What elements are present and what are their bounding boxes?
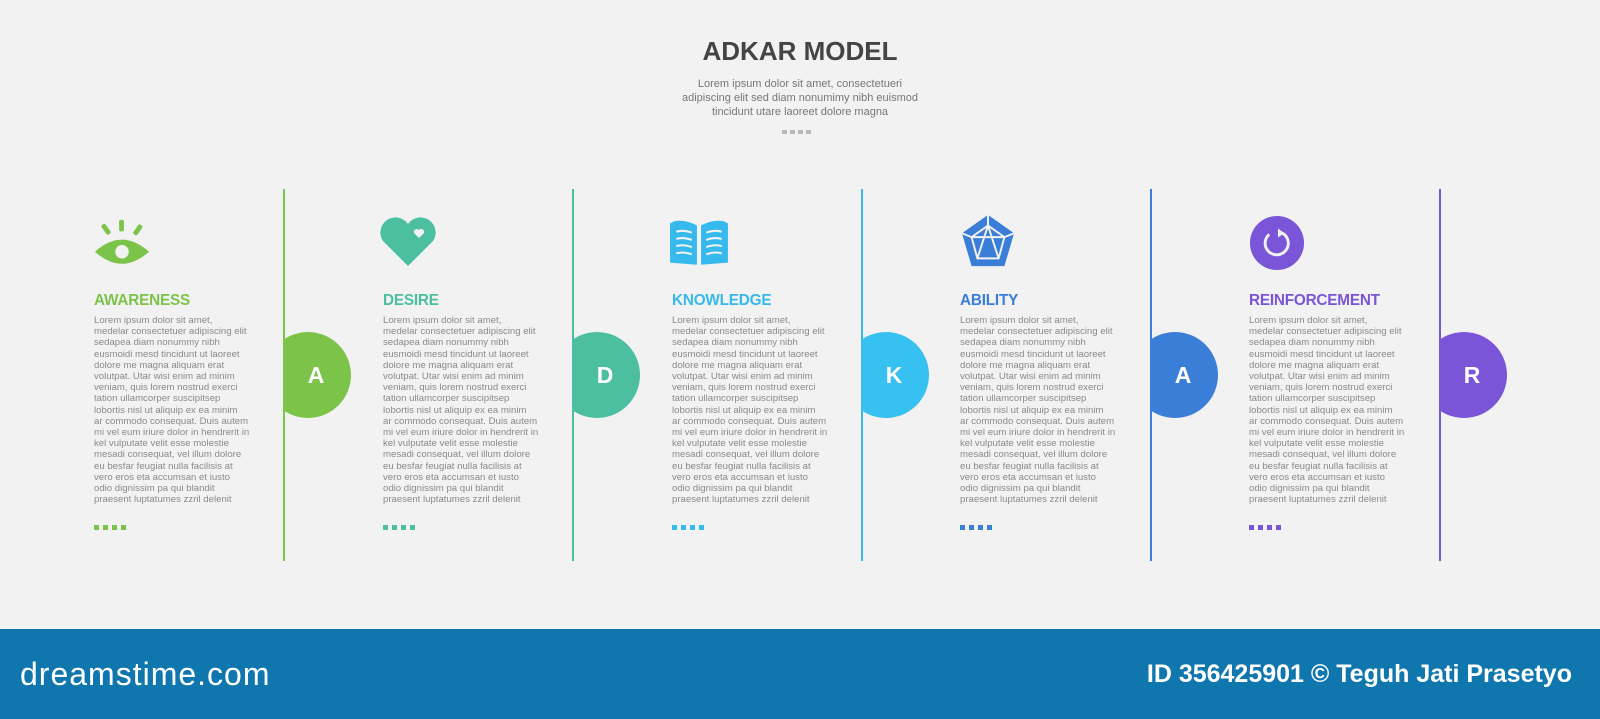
body text: sedapea diam nonummy nibh	[672, 337, 798, 348]
dots	[1249, 525, 1281, 530]
body text: praesent luptatumes zzril delenit	[672, 494, 810, 505]
body text: dolore me magna aliquam erat	[1249, 360, 1379, 371]
body text: eu besfar feugiat nulla facilisis at	[383, 461, 522, 472]
body text: lobortis nisl ut aliquip ex ea minim	[94, 405, 237, 416]
heading: REINFORCEMENT	[1249, 292, 1380, 309]
heading: AWARENESS	[94, 292, 190, 309]
body text: eusmoidi mesd tincidunt ut laoreet	[672, 349, 818, 360]
body text: mesadi consequat, vel illum dolore	[94, 449, 241, 460]
body text: tation ullamcorper suscipitsep	[1249, 393, 1375, 404]
body text: mi vel eum iriure dolor in hendrerit in	[960, 427, 1115, 438]
body text: kel vulputate velit esse molestie	[1249, 438, 1384, 449]
body text: ar commodo consequat. Duis autem	[1249, 416, 1403, 427]
dots	[94, 525, 126, 530]
divider line D	[572, 189, 574, 561]
body text: Lorem ipsum dolor sit amet,	[672, 315, 790, 326]
body text: praesent luptatumes zzril delenit	[383, 494, 521, 505]
body text: volutpat. Utar wisi enim ad minim	[383, 371, 524, 382]
body text: Lorem ipsum dolor sit amet,	[383, 315, 501, 326]
divider line K	[861, 189, 863, 561]
body text: lobortis nisl ut aliquip ex ea minim	[960, 405, 1103, 416]
body text: odio dignissim pa qui blandit	[383, 483, 504, 494]
body text	[383, 315, 538, 505]
body text: veniam, quis lorem nostrud exerci	[960, 382, 1103, 393]
body text	[94, 315, 249, 505]
body text: Lorem ipsum dolor sit amet,	[94, 315, 212, 326]
circle K: K	[886, 362, 902, 388]
circle A	[285, 332, 351, 418]
divider line A	[283, 189, 285, 561]
title: ADKAR MODEL	[702, 36, 898, 66]
body text: veniam, quis lorem nostrud exerci	[94, 382, 237, 393]
heading: ABILITY	[960, 292, 1018, 309]
body text: veniam, quis lorem nostrud exerci	[383, 382, 526, 393]
panel: awareness	[94, 220, 249, 530]
body text: mesadi consequat, vel illum dolore	[672, 449, 819, 460]
body text	[1249, 315, 1404, 505]
circle K	[863, 332, 929, 418]
body text: ar commodo consequat. Duis autem	[960, 416, 1114, 427]
body text: eusmoidi mesd tincidunt ut laoreet	[960, 349, 1106, 360]
footer credit: ID 356425901 © Teguh Jati Prasetyo	[1147, 660, 1572, 688]
body text: vero eros eta accumsan et iusto	[960, 472, 1096, 483]
body text: mesadi consequat, vel illum dolore	[1249, 449, 1396, 460]
body text: sedapea diam nonummy nibh	[960, 337, 1086, 348]
body text: eu besfar feugiat nulla facilisis at	[94, 461, 233, 472]
panel: reinforcement	[1249, 216, 1404, 530]
body text: veniam, quis lorem nostrud exerci	[672, 382, 815, 393]
body text: Lorem ipsum dolor sit amet,	[960, 315, 1078, 326]
body text: eu besfar feugiat nulla facilisis at	[672, 461, 811, 472]
body text: medelar consectetuer adipiscing elit	[94, 326, 247, 337]
icon: book	[670, 220, 728, 265]
body text: odio dignissim pa qui blandit	[94, 483, 215, 494]
body text: praesent luptatumes zzril delenit	[960, 494, 1098, 505]
body text: volutpat. Utar wisi enim ad minim	[960, 371, 1101, 382]
body text: volutpat. Utar wisi enim ad minim	[1249, 371, 1390, 382]
body text: mesadi consequat, vel illum dolore	[960, 449, 1107, 460]
body text	[960, 315, 1115, 505]
body text: volutpat. Utar wisi enim ad minim	[94, 371, 235, 382]
body text: praesent luptatumes zzril delenit	[94, 494, 232, 505]
body text: mi vel eum iriure dolor in hendrerit in	[94, 427, 249, 438]
body text: odio dignissim pa qui blandit	[960, 483, 1081, 494]
body text: dolore me magna aliquam erat	[672, 360, 802, 371]
body text: kel vulputate velit esse molestie	[383, 438, 518, 449]
body text: kel vulputate velit esse molestie	[94, 438, 229, 449]
body text: odio dignissim pa qui blandit	[1249, 483, 1370, 494]
circle A2: A	[1175, 362, 1191, 388]
body text: kel vulputate velit esse molestie	[960, 438, 1095, 449]
icon: pentagon radar	[962, 216, 1014, 266]
body text: sedapea diam nonummy nibh	[94, 337, 220, 348]
circle R: R	[1464, 362, 1480, 388]
icon: refresh circle	[1250, 216, 1304, 270]
circle A: A	[308, 362, 324, 388]
body text: eu besfar feugiat nulla facilisis at	[1249, 461, 1388, 472]
body text: sedapea diam nonummy nibh	[1249, 337, 1375, 348]
body text: mi vel eum iriure dolor in hendrerit in	[672, 427, 827, 438]
body text: vero eros eta accumsan et iusto	[672, 472, 808, 483]
body text: dolore me magna aliquam erat	[383, 360, 513, 371]
body text: mi vel eum iriure dolor in hendrerit in	[383, 427, 538, 438]
icon: heart	[380, 217, 436, 266]
body text: praesent luptatumes zzril delenit	[1249, 494, 1387, 505]
body text: tation ullamcorper suscipitsep	[383, 393, 509, 404]
body text: medelar consectetuer adipiscing elit	[960, 326, 1113, 337]
body text: lobortis nisl ut aliquip ex ea minim	[383, 405, 526, 416]
body text: dolore me magna aliquam erat	[960, 360, 1090, 371]
dots	[960, 525, 992, 530]
body text: eu besfar feugiat nulla facilisis at	[960, 461, 1099, 472]
body text: eusmoidi mesd tincidunt ut laoreet	[94, 349, 240, 360]
body text: medelar consectetuer adipiscing elit	[1249, 326, 1402, 337]
body text: sedapea diam nonummy nibh	[383, 337, 509, 348]
body text: tation ullamcorper suscipitsep	[94, 393, 220, 404]
body text: volutpat. Utar wisi enim ad minim	[672, 371, 813, 382]
icon: eye	[95, 220, 149, 264]
body text: lobortis nisl ut aliquip ex ea minim	[1249, 405, 1392, 416]
body text: odio dignissim pa qui blandit	[672, 483, 793, 494]
heading: DESIRE	[383, 292, 439, 309]
panel: knowledge	[670, 220, 827, 530]
body text: Lorem ipsum dolor sit amet,	[1249, 315, 1367, 326]
body text: tation ullamcorper suscipitsep	[960, 393, 1086, 404]
body text: eusmoidi mesd tincidunt ut laoreet	[383, 349, 529, 360]
body text: dolore me magna aliquam erat	[94, 360, 224, 371]
body text: tation ullamcorper suscipitsep	[672, 393, 798, 404]
heading: KNOWLEDGE	[672, 292, 771, 309]
divider line R	[1439, 189, 1441, 561]
body text: medelar consectetuer adipiscing elit	[672, 326, 825, 337]
divider line A2	[1150, 189, 1152, 561]
dots	[383, 525, 415, 530]
body text: veniam, quis lorem nostrud exerci	[1249, 382, 1392, 393]
body text: ar commodo consequat. Duis autem	[672, 416, 826, 427]
body text: eusmoidi mesd tincidunt ut laoreet	[1249, 349, 1395, 360]
body text: kel vulputate velit esse molestie	[672, 438, 807, 449]
subtitle: tincidunt utare laoreet dolore magna	[712, 106, 888, 118]
body text: vero eros eta accumsan et iusto	[94, 472, 230, 483]
body text: ar commodo consequat. Duis autem	[383, 416, 537, 427]
body text: lobortis nisl ut aliquip ex ea minim	[672, 405, 815, 416]
panel: desire	[380, 217, 538, 530]
footer logo: dreamstime.com	[20, 656, 270, 692]
body text: vero eros eta accumsan et iusto	[1249, 472, 1385, 483]
subtitle: Lorem ipsum dolor sit amet, consectetueri	[698, 78, 902, 90]
circle D	[574, 332, 640, 418]
body text: medelar consectetuer adipiscing elit	[383, 326, 536, 337]
circle A2	[1152, 332, 1218, 418]
subtitle: adipiscing elit sed diam nonumimy nibh euismod	[682, 92, 918, 104]
title dots	[782, 130, 811, 134]
footer band	[0, 629, 1600, 719]
dots	[672, 525, 704, 530]
subtitle	[682, 78, 918, 118]
body text: mesadi consequat, vel illum dolore	[383, 449, 530, 460]
body text: ar commodo consequat. Duis autem	[94, 416, 248, 427]
panel: ability	[960, 216, 1115, 530]
circle D: D	[597, 362, 613, 388]
body text	[672, 315, 827, 505]
circle R	[1441, 332, 1507, 418]
body text: mi vel eum iriure dolor in hendrerit in	[1249, 427, 1404, 438]
body text: vero eros eta accumsan et iusto	[383, 472, 519, 483]
